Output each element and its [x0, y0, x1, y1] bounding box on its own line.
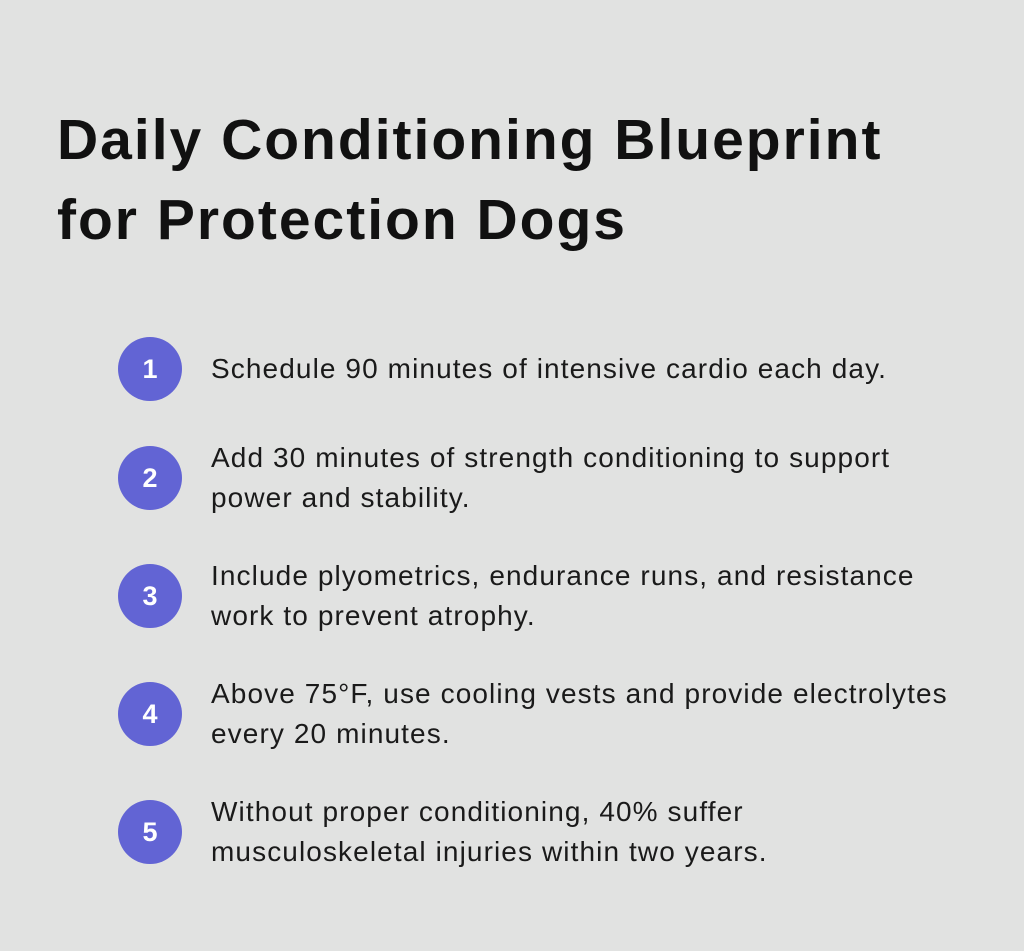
step 2: Add 30 minutes of strength conditioning to support: [211, 442, 890, 473]
step 5: 5: [142, 817, 158, 847]
step 1: Schedule 90 minutes of intensive cardio each day.: [211, 353, 887, 384]
step 5: Without proper conditioning, 40% suffer: [211, 796, 744, 827]
step 4: Above 75°F, use cooling vests and provide electrolytes: [211, 678, 948, 709]
step 3: work to prevent atrophy.: [211, 600, 536, 631]
step 5: [118, 796, 768, 867]
step 2: [118, 442, 890, 513]
step 4: 4: [142, 699, 158, 729]
step 3: [118, 560, 915, 631]
step 2: power and stability.: [211, 482, 471, 513]
step 3: Include plyometrics, endurance runs, and resistance: [211, 560, 915, 591]
step 1: [118, 337, 887, 401]
title: for Protection Dogs: [57, 188, 627, 252]
step 5: musculoskeletal injuries within two years.: [211, 836, 768, 867]
step 4: [118, 678, 948, 749]
title: Daily Conditioning Blueprint: [57, 108, 882, 172]
step 4: every 20 minutes.: [211, 718, 451, 749]
step 2: 2: [142, 463, 158, 493]
title: [57, 108, 882, 252]
step 1: 1: [142, 354, 158, 384]
step 3: 3: [142, 581, 158, 611]
